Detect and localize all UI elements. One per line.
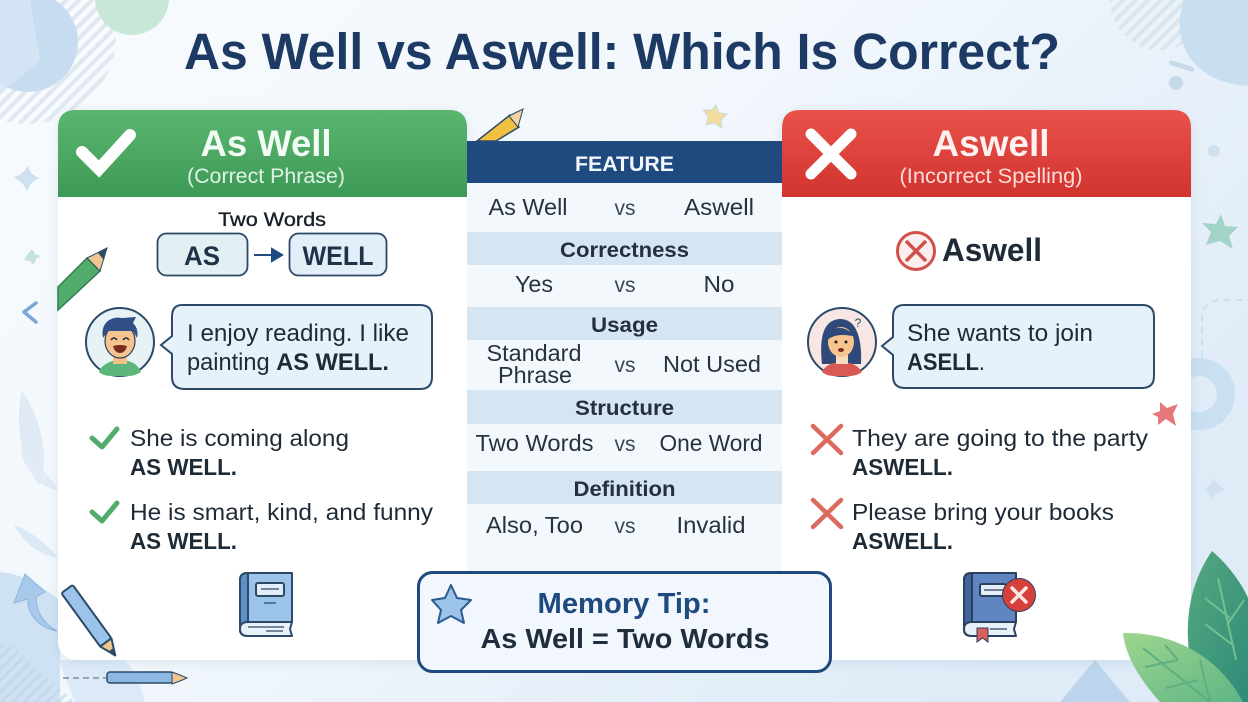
- icon: check mark: [82, 135, 130, 169]
- avatar: smiling boy: [86, 308, 154, 376]
- title: As Well vs Aswell: Which Is Correct?: [184, 23, 1060, 80]
- icon: chevron left: [24, 303, 36, 322]
- icon: curved arrow: [14, 574, 57, 631]
- row: definition: Invalid: [676, 512, 746, 538]
- example 1: [852, 425, 1148, 480]
- band: usage: Usage: [591, 313, 658, 337]
- band: structure: [467, 390, 782, 424]
- row: structure: Two Words: [476, 430, 594, 456]
- band: definition: Definition: [574, 477, 676, 501]
- memory tip text: As Well = Two Words: [480, 623, 770, 654]
- panel: aswell: [782, 110, 1191, 660]
- icon: blue book: [240, 573, 292, 636]
- row: structure: vs: [614, 433, 636, 456]
- band: definition: [467, 471, 782, 504]
- icon: blue star: [432, 585, 471, 623]
- icon: blue pencil: [61, 585, 121, 659]
- speech bubble: aswell: She wants to join: [907, 320, 1093, 347]
- icon: check 2: [92, 503, 117, 521]
- row: definition: [486, 512, 746, 538]
- icon: yellow pencil: [477, 109, 523, 141]
- heading: aswell: Aswell: [932, 123, 1050, 164]
- label: crossed aswell: Aswell: [942, 232, 1042, 268]
- icon: red star: [1152, 402, 1178, 426]
- example 2: [130, 499, 433, 554]
- band: correctness: [467, 232, 782, 265]
- diagram: as to well: [158, 234, 386, 276]
- avatar: confused girl: ?: [855, 316, 862, 330]
- icon: x 1: [813, 426, 841, 453]
- example 1: They are going to the party: [852, 425, 1148, 451]
- example 2: He is smart, kind, and funny: [130, 499, 433, 525]
- row: usage: vs: [614, 354, 636, 377]
- row: correctness: No: [704, 271, 734, 297]
- memory tip callout: [418, 572, 830, 672]
- example 2: [852, 499, 1114, 554]
- icon: green pencil: [58, 248, 107, 310]
- diagram: as to well: WELL: [302, 241, 374, 271]
- row: names: Aswell: [684, 194, 754, 220]
- row: correctness: vs: [614, 274, 636, 297]
- row: usage: Standard: [486, 340, 582, 366]
- row: names: As Well: [488, 194, 568, 220]
- row: usage: [486, 340, 761, 388]
- icon: x 2: [813, 500, 841, 527]
- panel: as well: [58, 110, 467, 660]
- heading: as well: As Well: [200, 123, 332, 164]
- label: crossed aswell: [898, 232, 1042, 270]
- icon: pale star left: [24, 249, 41, 265]
- row: definition: Also, Too: [486, 512, 583, 538]
- icon: book with x: [964, 573, 1036, 642]
- leaves: [1123, 551, 1248, 702]
- diagram: as to well: AS: [184, 241, 220, 271]
- panel header: as well: [58, 110, 467, 197]
- example 1: ASWELL.: [852, 454, 953, 480]
- table header: [467, 141, 782, 183]
- row: correctness: Yes: [515, 271, 553, 297]
- icon: teal star: [1202, 214, 1238, 249]
- icon: x mark: [811, 134, 851, 174]
- center table: [467, 141, 782, 583]
- label: two words: Two Words: [218, 209, 326, 231]
- icon: check 1: [92, 429, 117, 447]
- icon: horizontal pencil: [63, 672, 187, 684]
- speech bubble: as well: painting AS WELL.: [187, 349, 389, 376]
- avatar: confused girl: [808, 308, 876, 376]
- icon: yellow star: [703, 105, 727, 128]
- example 1: AS WELL.: [130, 454, 237, 480]
- row: names: [488, 194, 754, 220]
- subheading: correct phrase: (Correct Phrase): [187, 165, 345, 188]
- example 2: AS WELL.: [130, 528, 237, 554]
- speech bubble: aswell: [882, 305, 1154, 388]
- band: correctness: Correctness: [560, 238, 689, 262]
- example 2: Please bring your books: [852, 499, 1114, 525]
- row: correctness: [515, 271, 734, 297]
- row: usage: Not Used: [663, 351, 761, 377]
- example 1: [130, 425, 349, 480]
- speech bubble: as well: I enjoy reading. I like: [187, 320, 409, 347]
- row: structure: [476, 430, 762, 456]
- band: structure: Structure: [575, 396, 674, 420]
- speech bubble: as well: [161, 305, 432, 389]
- subheading: incorrect spelling: (Incorrect Spelling): [900, 165, 1082, 188]
- speech bubble: aswell: ASELL.: [907, 349, 985, 376]
- row: usage: Phrase: [498, 362, 572, 388]
- row: names: vs: [614, 197, 636, 220]
- row: structure: One Word: [660, 430, 762, 456]
- table header: FEATURE: [575, 152, 674, 176]
- memory tip heading: Memory Tip:: [538, 588, 710, 620]
- band: usage: [467, 307, 782, 340]
- panel header: aswell: [782, 110, 1191, 197]
- row: definition: vs: [614, 515, 636, 538]
- example 1: She is coming along: [130, 425, 349, 451]
- example 2: ASWELL.: [852, 528, 953, 554]
